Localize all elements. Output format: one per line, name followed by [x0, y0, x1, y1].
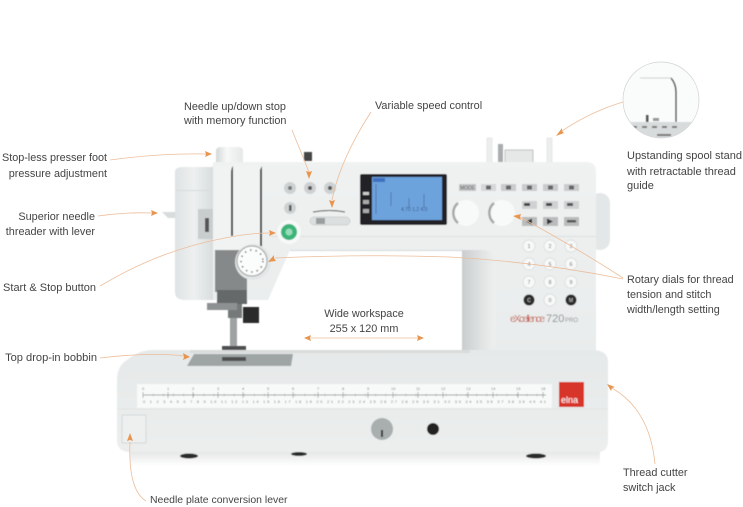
callout: needle stop memory — [183, 101, 312, 179]
callout: presser foot pressure: Stop-less presser foot — [2, 152, 107, 164]
callout: spool stand: guide — [627, 180, 654, 192]
base shadow — [130, 452, 600, 466]
brand badge: elna — [561, 395, 578, 405]
mode and function keys — [459, 184, 579, 226]
needle plate — [187, 354, 293, 366]
numeric keypad: C — [527, 298, 531, 304]
callout: rotary dials: width/length setting — [626, 304, 720, 316]
numeric keypad: 4 — [528, 262, 531, 268]
head front panel — [212, 165, 262, 304]
start stop button — [277, 220, 301, 244]
sewing machine: 720 — [546, 313, 564, 325]
thread lever — [162, 212, 175, 218]
ruler — [137, 384, 552, 408]
numeric keypad: 9 — [570, 280, 573, 286]
speed slider — [310, 210, 350, 225]
numeric keypad: 0 — [549, 298, 552, 304]
callout: variable speed — [329, 100, 482, 208]
callout: drop-in bobbin: Top drop-in bobbin — [5, 352, 97, 364]
callout: drop-in bobbin — [5, 352, 190, 364]
numeric keypad: 7 — [528, 280, 531, 286]
numeric keypad: 3 — [570, 244, 573, 250]
callout: rotary dials: Rotary dials for thread — [627, 274, 734, 286]
display screen — [360, 174, 447, 225]
sewing machine: PRO — [565, 318, 578, 324]
jack socket — [427, 423, 439, 435]
callout: variable speed: Variable speed control — [375, 100, 482, 112]
front dial — [371, 418, 393, 440]
callout: wide workspace — [304, 308, 424, 341]
callout: thread cutter jack — [607, 384, 688, 494]
callout: needle stop memory: with memory function — [183, 115, 286, 127]
numeric keypad — [523, 240, 577, 306]
callout: start and stop: Start & Stop button — [3, 282, 96, 294]
callout: wide workspace: Wide workspace — [324, 308, 404, 320]
presser foot and needle — [207, 303, 259, 353]
ruler: 4 — [242, 386, 245, 391]
ruler: 13 — [466, 386, 471, 391]
numeric keypad: 5 — [549, 262, 552, 268]
callout: spool stand — [556, 102, 742, 192]
inset: spool stand detail — [623, 62, 699, 138]
stitch dial — [235, 244, 271, 280]
left end cap — [175, 167, 213, 300]
ruler: 1 — [167, 386, 170, 391]
sewing machine — [117, 138, 610, 466]
ruler: 11 — [416, 386, 421, 391]
ruler: 0 1 2 3 4 5 6 7 8 9 10 11 12 13 14 15 16 17 18 19 20 21 22 23 24 25 26 27 28 29 30 31 32 33 34 35 36 37 38 39 40 41 — [143, 399, 547, 404]
handwheel — [590, 193, 610, 250]
ruler: 16 — [541, 386, 546, 391]
pillar shading — [462, 250, 495, 352]
callout: thread cutter jack: switch jack — [623, 482, 676, 494]
display screen: 4.70 1.2 4.0 — [401, 207, 428, 213]
numeric keypad: 8 — [549, 280, 552, 286]
ruler: 9 — [367, 386, 370, 391]
callout: presser foot pressure: pressure adjustment — [9, 168, 107, 180]
callout: spool stand: with retractable thread — [626, 166, 736, 178]
feet — [180, 452, 546, 458]
callout: needle threader: Superior needle — [18, 211, 95, 223]
callout: needle stop memory: Needle up/down stop — [184, 101, 286, 113]
base — [117, 350, 608, 452]
ruler: 6 — [292, 386, 295, 391]
callout: needle plate lever — [127, 433, 288, 506]
presser dial — [216, 147, 243, 165]
brand badge — [559, 382, 584, 407]
ruler: 3 — [217, 386, 220, 391]
callout: spool stand: Upstanding spool stand — [627, 150, 742, 162]
ruler: 7 — [317, 386, 320, 391]
ruler: 2 — [192, 386, 195, 391]
callout: wide workspace: 255 x 120 mm — [330, 323, 398, 335]
callout: rotary dials: tension and stitch — [627, 289, 711, 301]
callout: start and stop — [3, 230, 276, 294]
ruler: 8 — [342, 386, 345, 391]
numeric keypad: 6 — [570, 262, 573, 268]
callout: rotary dials — [268, 214, 734, 316]
spool pins — [487, 138, 552, 164]
callout: thread cutter jack: Thread cutter — [623, 467, 688, 479]
mode and function keys: MODE — [460, 186, 476, 192]
callout: needle threader: threader with lever — [6, 226, 95, 238]
conversion lever door — [122, 415, 146, 443]
ruler: 10 — [391, 386, 396, 391]
ruler: 15 — [516, 386, 521, 391]
model name: eXcellence — [510, 314, 545, 325]
callout: needle threader — [6, 210, 158, 238]
numeric keypad: 1 — [528, 244, 531, 250]
ruler: 12 — [441, 386, 446, 391]
numeric keypad: 2 — [549, 244, 552, 250]
callout: presser foot pressure — [2, 151, 212, 180]
ruler: 0 — [142, 386, 145, 391]
thread tension post — [304, 152, 312, 161]
ruler: 14 — [491, 386, 496, 391]
rotary dials — [453, 200, 515, 226]
callout: needle plate lever: Needle plate conversion lever — [150, 495, 288, 506]
numeric keypad: M — [569, 298, 573, 304]
machine arm and pillar — [213, 162, 596, 352]
left control buttons — [284, 182, 336, 214]
ruler: 5 — [267, 386, 270, 391]
